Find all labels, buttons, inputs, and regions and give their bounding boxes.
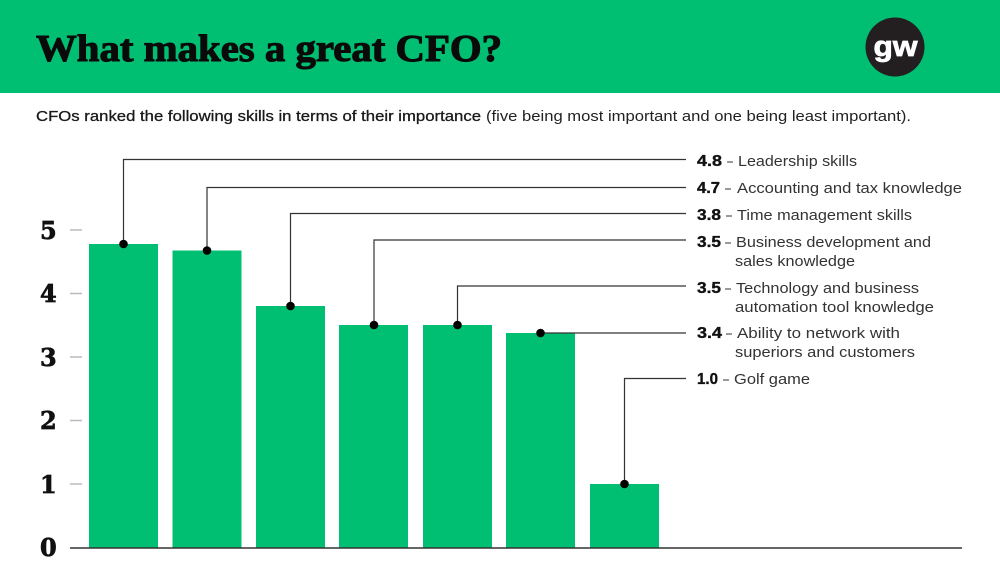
y axis: 0 <box>40 533 57 562</box>
label: leadership skills: Leadership skills <box>738 153 857 170</box>
label: ability to network: Ability to network with <box>737 325 900 342</box>
label: technology and business automation tool knowledge: 3.5 <box>697 280 721 297</box>
y axis: 2 <box>40 406 57 435</box>
label: ability to network: – <box>726 325 732 342</box>
label: golf game: 1.0 <box>697 371 718 388</box>
y axis: 5 <box>40 216 57 245</box>
label: business development and sales knowledge: Business development and <box>736 234 931 251</box>
label: technology and business automation tool knowledge: automation tool knowledge <box>735 299 934 316</box>
label: time management skills: Time management skills <box>737 207 912 224</box>
title: What makes a great CFO? <box>36 28 502 70</box>
label: technology and business automation tool knowledge: Technology and business <box>736 280 919 297</box>
bar: time management skills <box>256 306 325 548</box>
label: ability to network: 3.4 <box>697 325 722 342</box>
label: ability to network: superiors and customers <box>735 344 915 361</box>
label: business development and sales knowledge: – <box>725 234 731 251</box>
label: leadership skills: 4.8 <box>697 153 722 170</box>
icon: gw logo: gw <box>874 31 918 63</box>
bar: golf game <box>590 484 659 548</box>
bar: ability to network <box>506 333 575 548</box>
baseline <box>70 547 962 549</box>
bar: accounting and tax knowledge <box>172 250 242 548</box>
y axis <box>40 216 82 562</box>
bar chart <box>89 244 659 548</box>
intro text: CFOs ranked the following skills in terms of their importance <box>36 108 481 125</box>
header band <box>0 0 1000 93</box>
label: accounting and tax knowledge: Accounting and tax knowledge <box>737 180 962 197</box>
leader lines and dots <box>119 160 686 488</box>
label: technology and business automation tool knowledge: – <box>725 280 731 297</box>
label: business development and sales knowledge: 3.5 <box>697 234 721 251</box>
intro text: (five being most important and one being least important). <box>486 108 911 125</box>
bar: leadership skills <box>89 244 158 548</box>
label: leadership skills: – <box>727 153 733 170</box>
label: accounting and tax knowledge: – <box>725 180 731 197</box>
y axis: 4 <box>40 279 57 308</box>
label: accounting and tax knowledge: 4.7 <box>697 180 720 197</box>
label: time management skills: – <box>726 207 732 224</box>
y axis: 3 <box>40 343 57 372</box>
bar: business development and sales knowledge <box>339 325 408 548</box>
label: golf game: Golf game <box>734 371 810 388</box>
label: business development and sales knowledge: sales knowledge <box>735 253 855 270</box>
icon: gw logo <box>866 18 924 76</box>
bar: technology and business automation tool knowledge <box>423 325 492 548</box>
y axis: 1 <box>40 470 57 499</box>
label: time management skills: 3.8 <box>697 207 721 224</box>
label: golf game: – <box>723 371 729 388</box>
